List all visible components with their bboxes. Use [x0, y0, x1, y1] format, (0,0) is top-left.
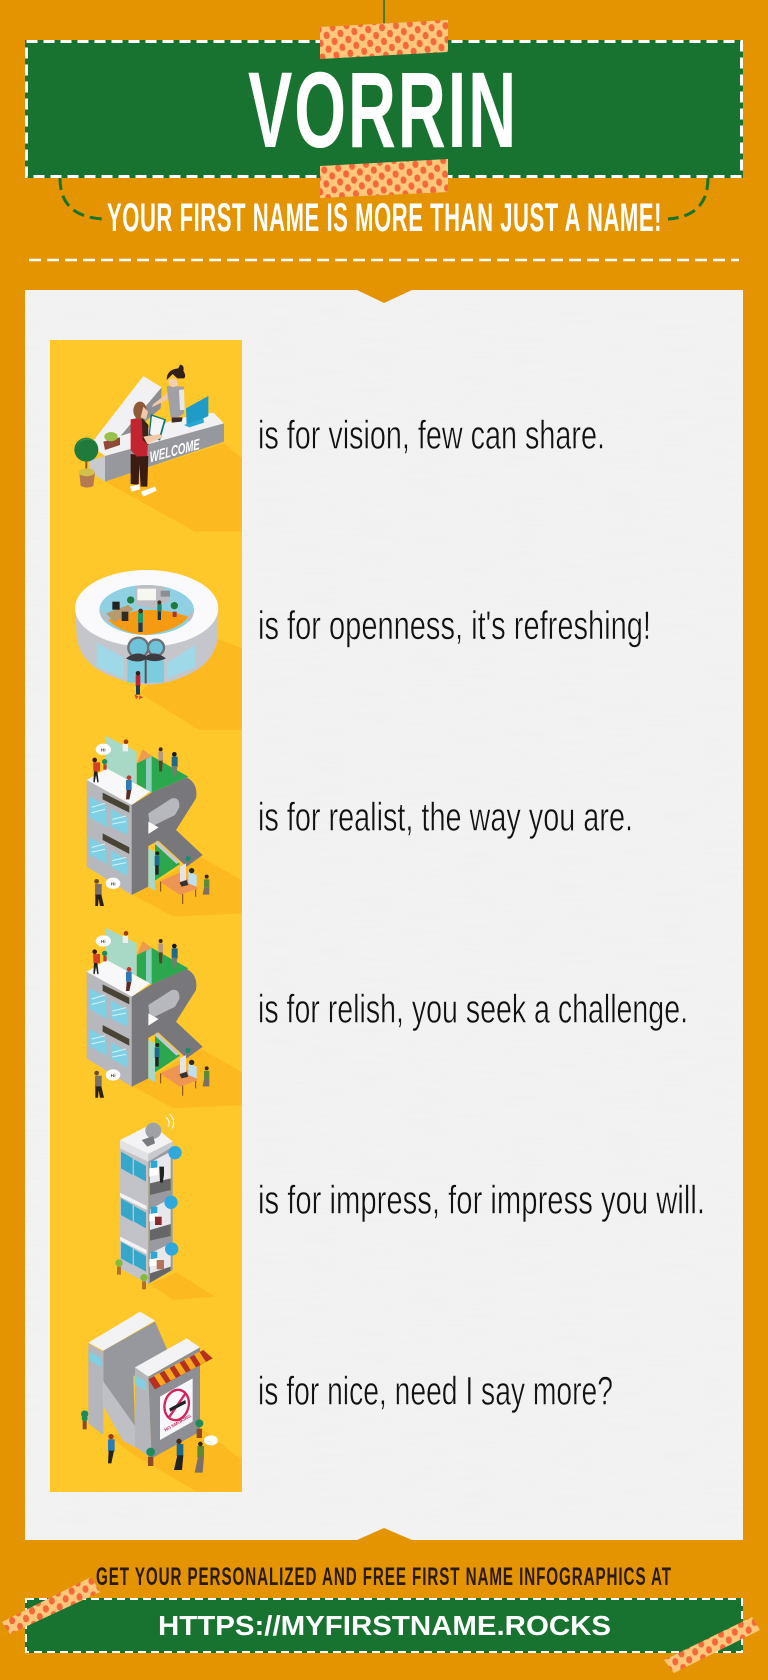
panel: main paper: [25, 290, 743, 1540]
text: speech bubble top: Hi: [101, 747, 106, 753]
text: speech bubble bottom: [106, 878, 120, 889]
icon: V welcome desk: [74, 365, 242, 532]
text: N line: is for nice, need I say more?: [258, 1370, 613, 1414]
icon: R building repeat: [87, 928, 242, 1108]
no-smoking sign: NO SMOKING: [163, 1413, 192, 1433]
title: VORRIN: [248, 49, 518, 170]
awning: [148, 1350, 213, 1389]
text: speech bubble bottom: [106, 1069, 120, 1081]
no-smoking sign: [160, 1378, 193, 1440]
text: speech bubble bottom: Hi: [111, 1073, 116, 1079]
header banner: [25, 0, 743, 198]
speech bubble: [204, 1435, 218, 1445]
speech bubble: ...: [208, 1438, 212, 1443]
text: R line one: is for realist, the way you are.: [258, 796, 633, 840]
icon: O optician ring: [75, 570, 242, 730]
footer url banner: HTTPS://MYFIRSTNAME.ROCKS: [158, 1610, 611, 1641]
tape: top: [320, 20, 448, 59]
tape: footer left: [2, 1577, 100, 1634]
icon: N shop: [81, 1312, 242, 1492]
tape: footer right: [664, 1617, 760, 1673]
tape: bottom: [320, 159, 448, 198]
text: speech bubble bottom: Hi: [111, 881, 116, 887]
text: speech bubble top: Hi: [101, 939, 106, 945]
panel: yellow illustration column: [50, 340, 242, 1492]
icon: V welcome desk: WELCOME: [149, 437, 201, 466]
subtitle with dashed brackets: [60, 178, 708, 240]
footer url banner: [2, 1577, 760, 1673]
icon: I tower: [115, 1114, 215, 1300]
icon: R building: [87, 720, 242, 917]
text: speech bubble top: [96, 744, 111, 755]
text: V line: is for vision, few can share.: [258, 414, 605, 458]
text: speech bubble top: [96, 935, 111, 947]
